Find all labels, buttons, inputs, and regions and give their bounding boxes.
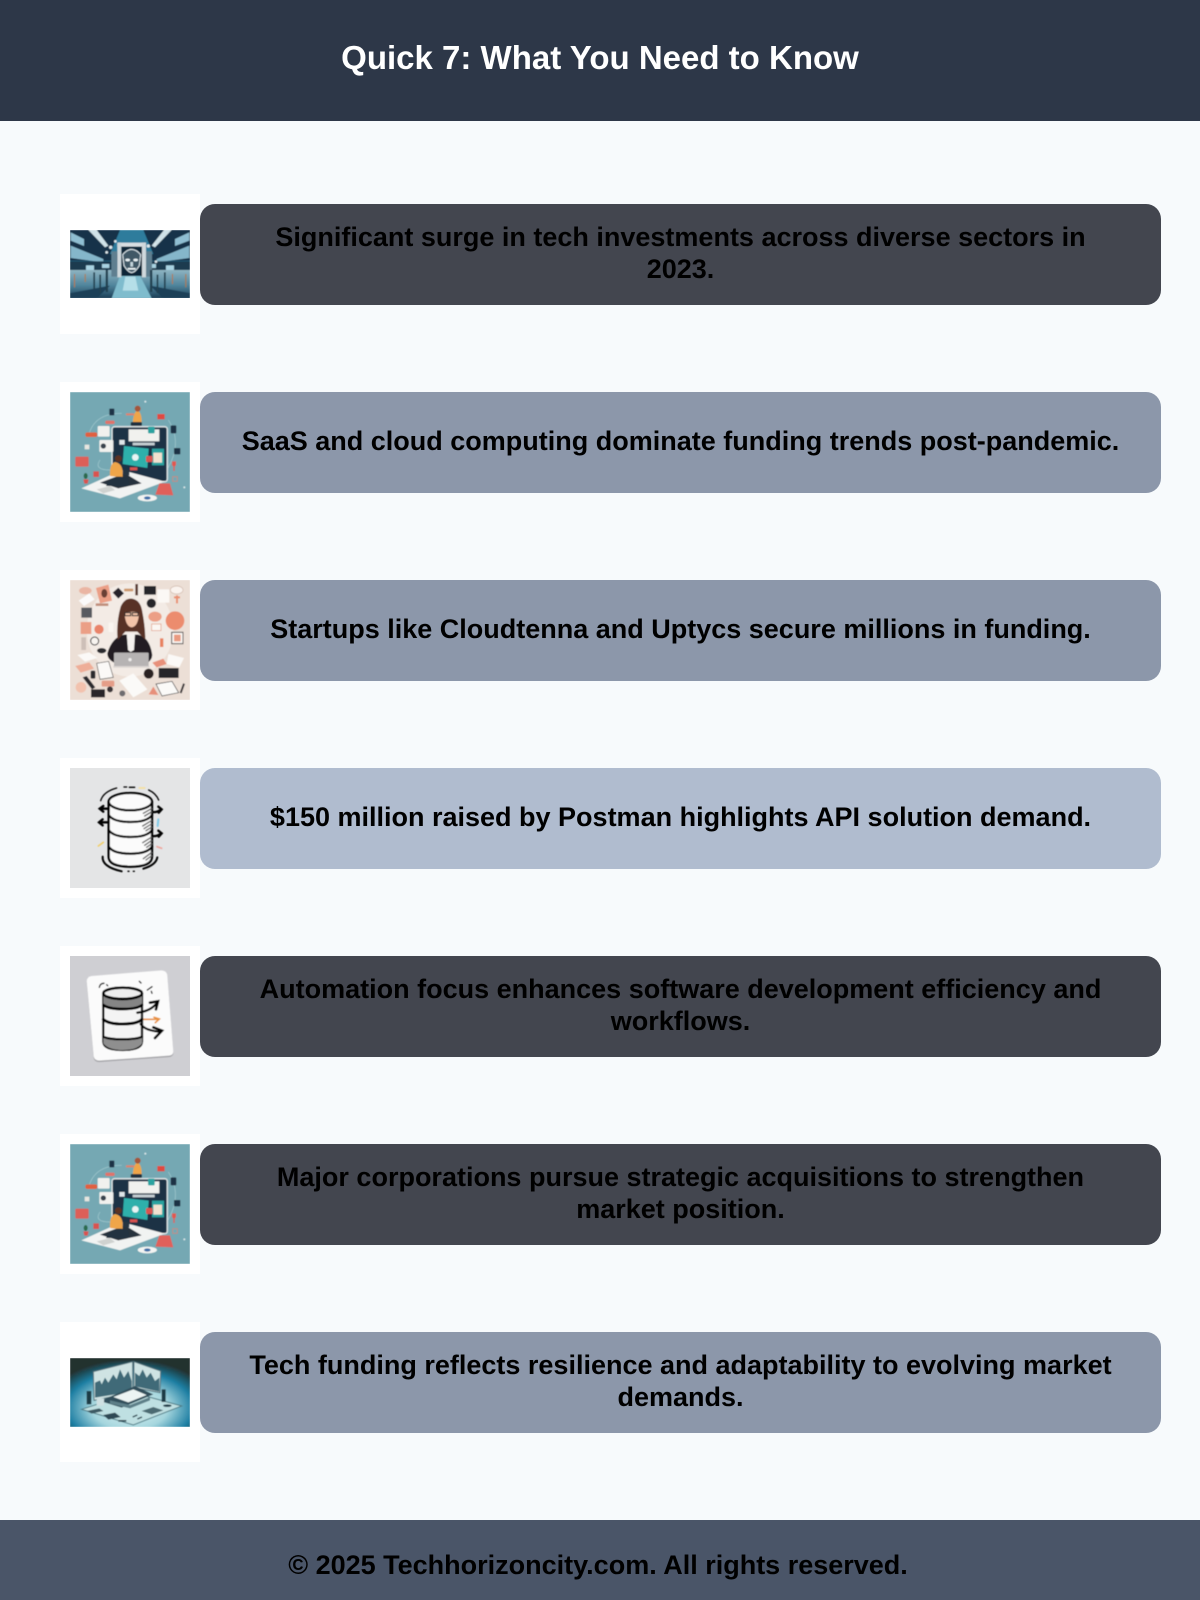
panel: takeaway 6 [70, 1144, 1161, 1264]
panel: takeaway 7 [70, 1332, 1161, 1433]
panel: takeaway 4 [70, 768, 1161, 888]
footer [0, 1520, 1200, 1600]
header banner [0, 0, 1200, 121]
title: Quick 7: What You Need to Know [341, 38, 859, 76]
text bar 6 [200, 1144, 1161, 1245]
panel: takeaway 5 [70, 956, 1161, 1076]
panel: takeaway 2 [70, 392, 1161, 512]
text bar 5 [200, 956, 1161, 1057]
text bar 4 [200, 768, 1161, 869]
text bar 7 [200, 1332, 1161, 1433]
panel: takeaway 1 [70, 204, 1161, 305]
text bar 3 [200, 580, 1161, 681]
icon: face scanning gate [70, 230, 190, 298]
icon: woman with laptop and stationery [70, 580, 190, 700]
text bar 3: Startups like Cloudtenna and Uptycs secure millions in funding. [270, 614, 1091, 644]
text bar 7: Tech funding reflects resilience and adaptability to evolving market demands. [249, 1350, 1112, 1412]
icon: database sticker with arrows [70, 956, 190, 1076]
text bar 2 [200, 392, 1161, 493]
icon: isometric screens and platform [70, 1358, 190, 1427]
thumbnail: founder [60, 570, 200, 710]
thumbnail: database [60, 758, 200, 898]
text bar 5: Automation focus enhances software development efficiency and workflows. [260, 974, 1101, 1036]
text bar 4: $150 million raised by Postman highlights API solution demand. [270, 802, 1091, 832]
thumbnail: SaaS laptop repeat [60, 1134, 200, 1274]
icon: laptop with people [70, 392, 190, 512]
text bar 1 [200, 204, 1161, 305]
thumbnail: SaaS laptop [60, 382, 200, 522]
thumbnail: security gate [60, 194, 200, 334]
text bar 1: Significant surge in tech investments across diverse sectors in 2023. [275, 222, 1086, 284]
thumbnail: workspace [60, 1322, 200, 1462]
thumbnail: automation [60, 946, 200, 1086]
text bar 6: Major corporations pursue strategic acquisitions to strengthen market position. [277, 1162, 1084, 1224]
icon: laptop with people [70, 1144, 190, 1264]
text bar 2: SaaS and cloud computing dominate funding trends post-pandemic. [242, 426, 1119, 456]
panel: takeaway 3 [70, 580, 1161, 700]
icon: database cylinder with arrows [70, 768, 190, 888]
footer: © 2025 Techhorizoncity.com. All rights reserved. [288, 1550, 908, 1580]
